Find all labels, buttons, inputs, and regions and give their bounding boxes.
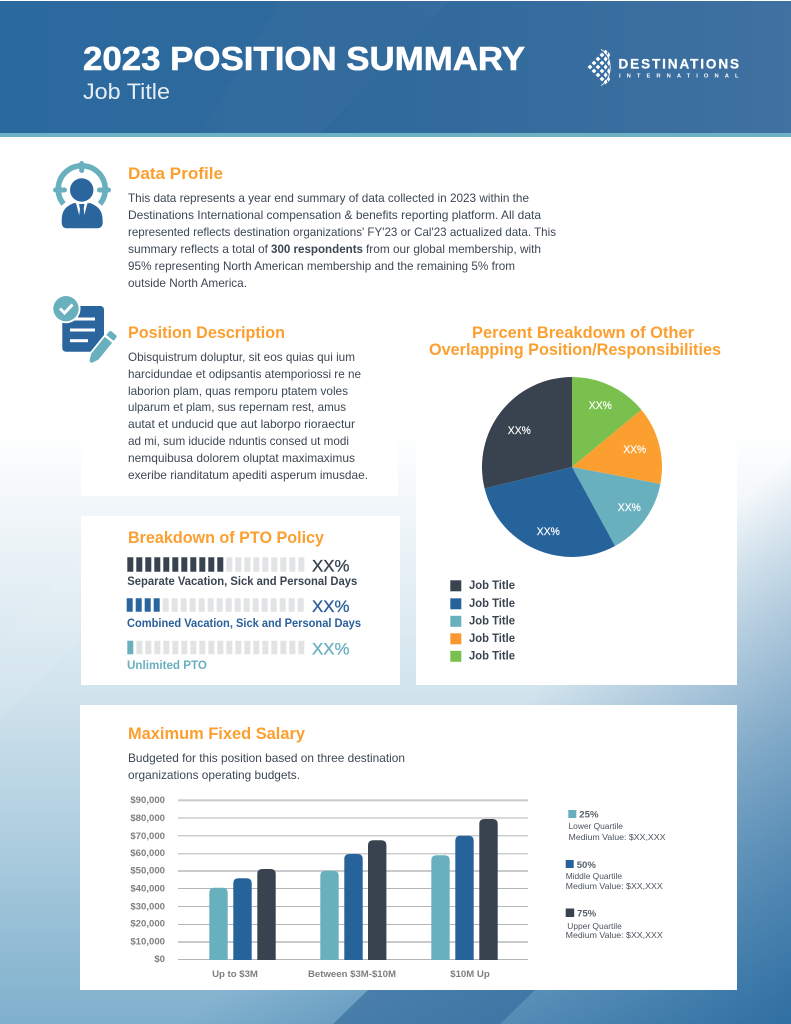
text block: salary description: organizations operating budgets. [128,769,300,782]
legend item: 50%: Middle Quartile [566,871,622,881]
text block: data profile body [128,192,556,290]
bar row: combined days: Combined Vacation, Sick and Personal Days [127,618,361,630]
panel: pie chart breakdown [416,324,737,685]
text block: position description body [128,351,368,482]
text block: data profile body: 300 respondents [271,243,363,256]
heading: maximum fixed salary: Maximum Fixed Salary [128,725,306,743]
bar chart: $10,000 [130,936,165,948]
quartile legend [566,810,666,940]
bar chart: $10M Up [450,969,490,980]
text block: data profile body: summary reflects a total of [128,243,269,256]
text block: data profile body: outside North America. [128,277,247,290]
legend item: 75% [566,908,663,940]
pie chart [482,377,662,557]
pie chart: XX% [508,425,531,437]
text block: salary description [128,752,405,782]
legend item: 50%: 50% [577,860,596,871]
bar chart: $60,000 [130,848,165,859]
heading: PTO policy: Breakdown of PTO Policy [128,529,325,547]
text block: position description body: Obisquistrum doluptur, sit eos quias qui ium [128,351,355,364]
bar row: separate days [127,556,357,588]
logo: Destinations International [588,50,739,86]
text block: data profile body: represented reflects destination organizations' FY'23 or Cal'23 actualized data. This [128,226,556,239]
legend item: 75%: Upper Quartile [567,921,622,931]
bar chart: Up to $3M [212,969,258,980]
heading: percent breakdown [429,324,721,359]
text block: position description body: nemquibusa dolorem oluptat maximaximus [128,452,355,465]
bar row: combined days: XX% [312,597,350,616]
bar chart: $50,000 [130,866,165,876]
panel: maximum fixed salary [80,705,737,990]
text block: position description body: laborion plam, quas remporu ptatem voles [128,385,348,398]
text block: position description body: ad mi, sum iducide nduntis consed ut modi [128,435,349,448]
icon: document with check and pencil [52,294,120,368]
subtitle: Job Title [83,79,170,104]
heading: position description: Position Description [128,324,285,342]
bar chart [130,795,528,980]
text block: data profile body: 95% representing North American membership and the remaining 5% from [128,260,515,273]
legend item: 50%: Medium Value: $XX,XXX [566,881,663,891]
bar chart: $20,000 [130,918,165,930]
pie legend [450,578,515,662]
pie chart: XX% [537,526,560,538]
bar chart: $0 [154,954,165,965]
bar row: unlimited PTO: Unlimited PTO [127,660,207,672]
bar row: separate days: XX% [312,556,350,576]
bar chart: $30,000 [130,902,165,912]
bar chart: $40,000 [130,884,165,894]
pie legend: Job Title [469,631,515,645]
legend item: 25%: 25% [579,810,599,820]
legend item: 25%: Lower Quartile [568,821,623,831]
text block: position description body: ulparum et plam, sus repernam rest, amus [128,401,346,414]
pie chart: XX% [618,502,641,514]
pie chart: XX% [623,444,646,456]
bar row: separate days: Separate Vacation, Sick and Personal Days [127,576,357,588]
pie chart: XX% [589,400,612,412]
bar row: combined days [127,597,361,630]
text block: data profile body: This data represents a year end summary of data collected in 2023 within the [128,192,529,205]
legend item: 75%: 75% [577,908,597,920]
pie legend: Job Title [469,613,515,627]
icon: person in target [53,161,111,228]
legend item: 50% [566,860,663,891]
text block: position description body: autat et unducid que aut laborpo rioraectur [128,418,355,431]
heading: percent breakdown: Overlapping Position/Responsibilities [429,341,721,359]
title: 2023 POSITION SUMMARY [83,41,525,78]
logo: Destinations International: INTERNATIONAL [619,74,739,80]
pie legend: Job Title [469,596,515,610]
bar chart: $70,000 [130,831,165,842]
bar chart: $90,000 [130,795,165,806]
text block: salary description: Budgeted for this position based on three destination [128,752,405,765]
heading: data profile: Data Profile [128,165,223,183]
heading: percent breakdown: Percent Breakdown of Other [472,324,695,342]
panel: data profile [128,165,556,290]
text block: data profile body: from our global membership, with [366,243,541,256]
legend item: 75%: Medium Value: $XX,XXX [566,930,663,940]
text block: position description body: exeribe rianditatum apediti asperum imusdae. [128,469,368,482]
panel: position description [81,324,398,496]
bar chart: Between $3M-$10M [308,969,396,980]
bar chart: $80,000 [130,813,165,824]
header banner [0,1,791,137]
bar row: unlimited PTO [127,640,350,672]
pie legend: Job Title [469,648,515,662]
panel: PTO policy breakdown [81,516,400,685]
legend item: 25%: Medium Value: $XX,XXX [568,832,666,842]
text block: data profile body: Destinations International compensation & benefits reporting platform. All data [128,209,542,222]
pie legend: Job Title [469,578,515,592]
text block: position description body: harcidundae et odipsantis atemporiossi re ne [128,368,361,381]
legend item: 25% [568,810,666,842]
logo: Destinations International: DESTINATIONS [618,56,739,72]
bar row: unlimited PTO: XX% [312,640,350,658]
